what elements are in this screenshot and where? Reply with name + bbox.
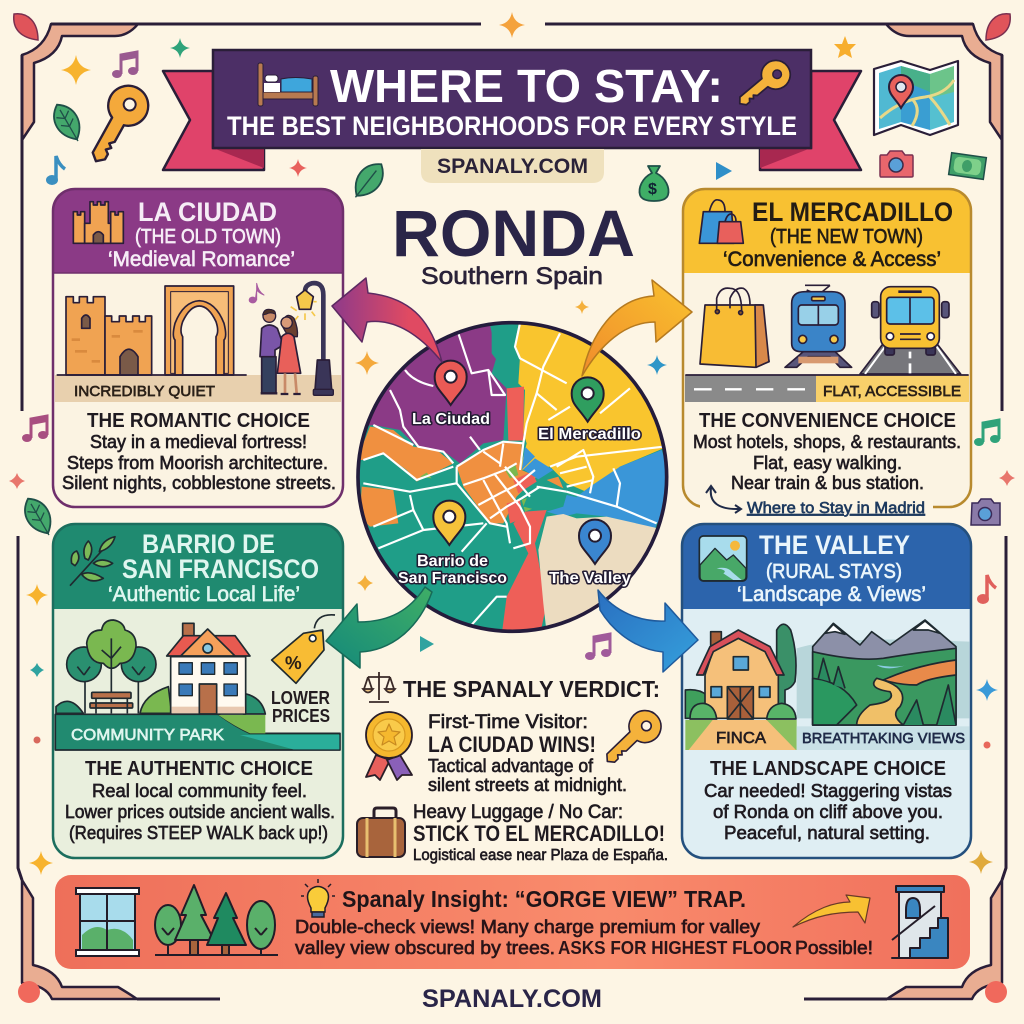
heading line 2: THE BEST NEIGHBORHOODS FOR EVERY STYLE (227, 111, 797, 141)
label: COMMUNITY PARK (71, 727, 224, 744)
header text: ‘Medieval Romance’ (108, 248, 295, 271)
label: lower prices: PRICES (272, 706, 330, 726)
icon: light bulb (301, 879, 335, 917)
header text: SAN FRANCISCO (122, 554, 319, 584)
body text (62, 410, 336, 493)
body text: THE ROMANTIC CHOICE (87, 410, 310, 432)
district: east blue (522, 447, 553, 479)
verdict: heavy luggage: Heavy Luggage / No Car: (413, 802, 623, 823)
icon: verdict key (597, 704, 668, 774)
footer url: SPANALY.COM (422, 985, 602, 1013)
icon: olive branch (70, 537, 115, 586)
body text (65, 758, 335, 843)
body text: Car needed! Staggering vistas (704, 780, 952, 801)
body text: Flat, easy walking. (753, 452, 902, 473)
body text: of Ronda on cliff above you. (713, 801, 943, 822)
insight text: ASKS FOR HIGHEST FLOOR (558, 938, 792, 958)
insight heading: Spanaly Insight: “GORGE VIEW” TRAP. (342, 886, 746, 912)
icon: trees (155, 885, 278, 955)
map of Ronda (356, 320, 668, 634)
arrow: to la ciudad (332, 278, 442, 362)
header text: ‘Landscape & Views’ (737, 583, 926, 606)
panel: la ciudad (53, 189, 343, 507)
icon: scales (363, 672, 395, 702)
icon: banknote (949, 153, 986, 179)
body text: Stay in a medieval fortress! (90, 431, 307, 452)
verdict: heavy luggage: STICK TO EL MERCADILLO! (413, 821, 665, 846)
streets (363, 323, 663, 627)
insight bar (55, 875, 970, 969)
district: el mercadillo (515, 317, 667, 493)
illustration: community park band (55, 714, 340, 750)
link gap (700, 500, 933, 514)
illustration: fortress (66, 297, 152, 375)
panel: barrio de san francisco (53, 524, 343, 858)
header text (108, 529, 319, 606)
illustration: house (140, 623, 265, 714)
body text: Steps from Moorish architecture. (67, 452, 328, 473)
label: lower prices (271, 688, 330, 726)
verdict: first-time visitor: First-Time Visitor: (428, 712, 588, 733)
icon: bed (258, 63, 318, 106)
verdict: heavy luggage: Logistical ease near Plaza de España. (413, 847, 668, 864)
map labels: El Mercadillo (538, 426, 641, 443)
icon: big golden key (80, 79, 155, 172)
map labels: The Valley (549, 570, 631, 587)
body text: Lower prices outside ancient walls. (65, 801, 335, 822)
header text: (RURAL STAYS) (766, 561, 902, 583)
icon: small camera right (971, 499, 1000, 525)
body text: THE CONVENIENCE CHOICE (699, 410, 956, 432)
path + band (685, 720, 797, 750)
icon: window (76, 888, 139, 956)
verdict: first-time visitor: Tactical advantage of (428, 756, 594, 776)
header text: EL MERCADILLO (752, 197, 953, 227)
icon: castle (73, 202, 123, 243)
body text: Silent nights, cobblestone streets. (62, 472, 336, 493)
arrow: gold (793, 895, 870, 927)
arrow: to valley (598, 590, 698, 672)
label: FLAT, ACCESSIBLE (823, 383, 961, 400)
illustration: price tag: % (285, 652, 302, 673)
pin: valley (579, 520, 611, 564)
verdict: first-time visitor (428, 712, 627, 795)
header text: LA CIUDAD (138, 197, 277, 227)
website tag (421, 149, 604, 183)
icon: title key (731, 54, 796, 115)
body text: THE AUTHENTIC CHOICE (85, 758, 313, 780)
right ribbon tail (760, 71, 861, 170)
insight text: valley view obscured by trees. (295, 938, 555, 958)
body text: Real local community feel. (92, 780, 307, 801)
arrow: link pointer (706, 486, 741, 513)
illustration: shopping bag (700, 288, 769, 367)
header text: (THE NEW TOWN) (770, 226, 923, 248)
verdict: first-time visitor: LA CIUDAD WINS! (428, 732, 596, 757)
panel: el mercadillo (683, 189, 971, 517)
illustration: moorish arch (165, 286, 234, 375)
centre orange (457, 443, 537, 523)
icon: medal (366, 712, 412, 780)
body text: THE LANDSCAPE CHOICE (710, 758, 946, 780)
header text: THE VALLEY (759, 530, 910, 560)
map labels: San Francisco (398, 570, 507, 587)
river (502, 510, 547, 635)
icon: stair tower (892, 886, 948, 958)
verdict section (357, 672, 668, 864)
pin: barrio (433, 501, 465, 545)
district: orange west (357, 427, 453, 482)
body text: Peaceful, natural setting. (724, 822, 930, 843)
label: BREATHTAKING VIEWS (802, 730, 965, 747)
icon: camera (880, 151, 913, 177)
heading line 1: WHERE TO STAY: (330, 60, 723, 112)
verdict: heavy luggage (413, 802, 668, 864)
header text (737, 530, 926, 606)
illustration: farmhouse (685, 624, 796, 719)
red sliver (507, 387, 524, 441)
label: INCREDIBLY QUIET (74, 383, 215, 400)
header text: ‘Convenience & Access’ (723, 248, 941, 271)
insight text: Possible! (795, 938, 873, 958)
notes (112, 52, 138, 78)
icon: folded map (874, 61, 958, 135)
pin: el mercadillo (572, 377, 604, 422)
body text (704, 758, 952, 843)
subheading: Southern Spain (421, 263, 603, 290)
body text (693, 410, 961, 493)
icon: small note (249, 283, 264, 303)
title banner (163, 50, 861, 170)
teal centre right (524, 496, 534, 509)
label: FINCA (716, 730, 766, 747)
icon: money bag (640, 166, 668, 201)
header text (108, 197, 295, 271)
map labels: La Ciudad (412, 411, 490, 428)
illustration: bus on road (860, 287, 961, 374)
insight text: Double-check views! Many charge premium for valley (295, 917, 760, 937)
verdict heading: THE SPANALY VERDICT: (403, 676, 660, 702)
header text: ‘Authentic Local Life’ (108, 583, 300, 606)
arrow: to el mercadillo (582, 280, 692, 376)
banner plate (213, 50, 811, 148)
district: top teal (490, 326, 507, 388)
leaves (47, 99, 88, 147)
map labels: Barrio de (417, 553, 488, 570)
panel: the valley (682, 524, 971, 858)
header text (723, 197, 953, 271)
district: la ciudad (368, 326, 506, 464)
heading: Ronda: RONDA (392, 196, 635, 270)
website tag: SPANALY.COM (437, 155, 588, 178)
illustration: mountain view (813, 620, 956, 725)
label: lower prices: LOWER (271, 688, 330, 708)
illustration: couple under lamp (260, 283, 333, 395)
arrow: to barrio (326, 587, 432, 668)
insight text (295, 917, 873, 958)
header text: (THE OLD TOWN) (135, 226, 281, 248)
body text: Most hotels, shops, & restaurants. (693, 431, 961, 452)
illustration: train (785, 285, 852, 367)
map labels (398, 411, 641, 587)
illustration: trees (56, 620, 156, 713)
body text: Near train & bus station. (731, 472, 924, 493)
backdrop hill (797, 639, 969, 718)
header text: BARRIO DE (142, 529, 275, 559)
verdict: first-time visitor: silent streets at midnight. (428, 775, 627, 795)
illustration: price tag (272, 615, 335, 683)
icon: shopping bags (699, 200, 743, 243)
body text: (Requires STEEP WALK back up!) (69, 822, 328, 843)
link: Where to Stay in Madrid (747, 500, 925, 517)
icon: money bag: $ (648, 181, 657, 198)
icon: suitcase (357, 808, 405, 857)
district: the valley (538, 514, 658, 633)
icon: landscape (699, 536, 747, 581)
pin: la ciudad (435, 361, 467, 405)
left ribbon tail (163, 71, 264, 170)
